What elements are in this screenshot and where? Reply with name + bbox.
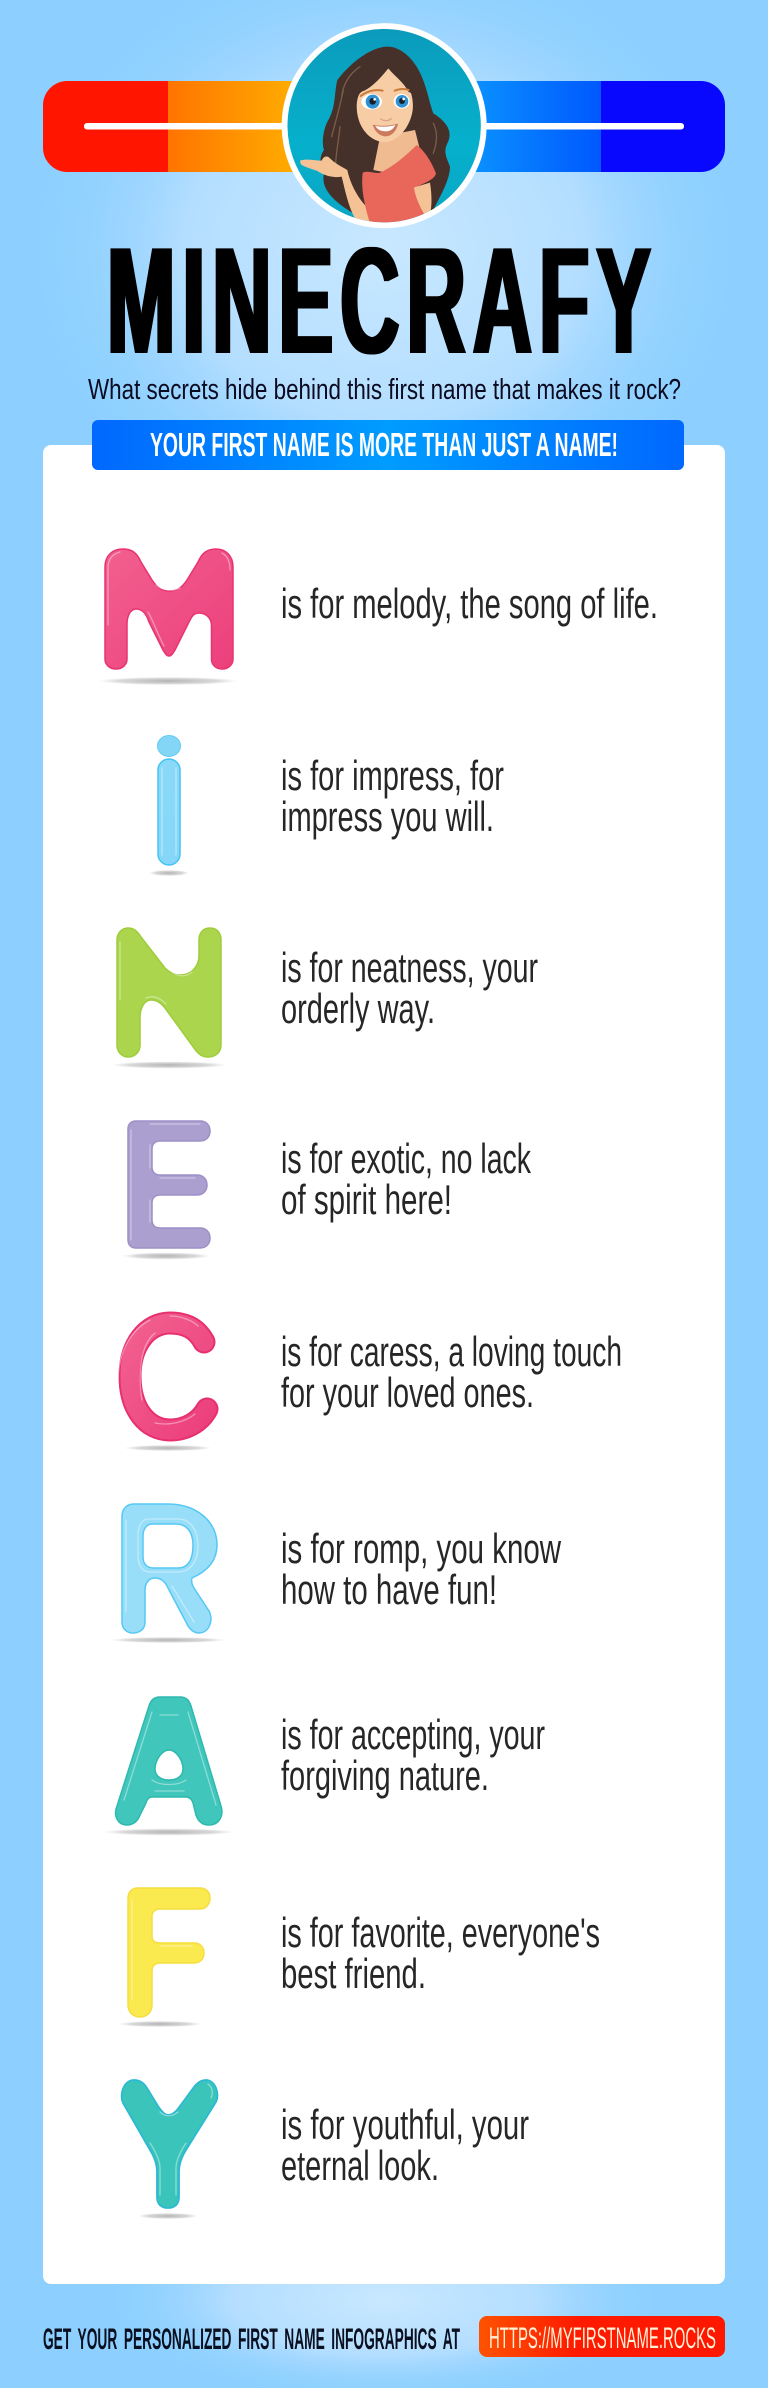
row: C	[118, 1316, 622, 1451]
text I: is for impress, for	[281, 752, 504, 799]
text A	[281, 1711, 545, 1799]
header colour bar	[43, 81, 725, 172]
row: I	[149, 736, 504, 876]
row: M	[98, 549, 658, 685]
letter A	[103, 1697, 235, 1836]
letter F	[118, 1888, 210, 2027]
nose	[381, 119, 391, 121]
row: R	[110, 1504, 561, 1643]
avatar medallion	[282, 23, 487, 228]
eyes	[361, 94, 382, 109]
text E: of spirit here!	[281, 1176, 452, 1223]
text N: orderly way.	[281, 985, 435, 1032]
text C: for your loved ones.	[281, 1369, 534, 1416]
text I: impress you will.	[281, 793, 494, 840]
text A: forgiving nature.	[281, 1752, 489, 1799]
text N: is for neatness, your	[281, 944, 538, 991]
text A: is for accepting, your	[281, 1711, 545, 1758]
text F: is for favorite, everyone's	[281, 1909, 600, 1956]
row: E	[122, 1121, 532, 1260]
footer url button	[479, 2316, 725, 2357]
top	[362, 145, 436, 223]
text Y: eternal look.	[281, 2142, 439, 2189]
letter I	[149, 736, 189, 876]
sleeve arm	[414, 183, 431, 214]
letter R	[110, 1504, 226, 1643]
row: N	[111, 928, 538, 1068]
text E: is for exotic, no lack	[281, 1135, 532, 1182]
row: F	[118, 1888, 600, 2027]
letter C	[118, 1316, 212, 1451]
fringe	[358, 67, 412, 95]
arm and hand	[300, 157, 372, 223]
letter E	[122, 1121, 210, 1260]
text F	[281, 1909, 600, 1997]
neck	[373, 130, 420, 173]
main white panel	[43, 445, 725, 2284]
face	[357, 68, 413, 142]
letter N	[111, 928, 227, 1068]
row: Y	[122, 2080, 529, 2219]
text N	[281, 944, 538, 1032]
text Y: is for youthful, your	[281, 2101, 529, 2148]
text R: is for romp, you know	[281, 1525, 561, 1572]
banner	[92, 420, 684, 470]
text R: how to have fun!	[281, 1566, 497, 1613]
hair	[320, 47, 450, 213]
text C	[281, 1328, 622, 1416]
text E	[281, 1135, 532, 1223]
text I	[281, 752, 504, 840]
letter Y	[122, 2080, 217, 2219]
title: MINECRAFY	[107, 215, 658, 385]
text R	[281, 1525, 561, 1613]
row: A	[103, 1697, 545, 1836]
letter M	[98, 549, 238, 685]
text F: best friend.	[281, 1950, 426, 1997]
text Y	[281, 2101, 529, 2189]
mouth	[373, 124, 398, 136]
